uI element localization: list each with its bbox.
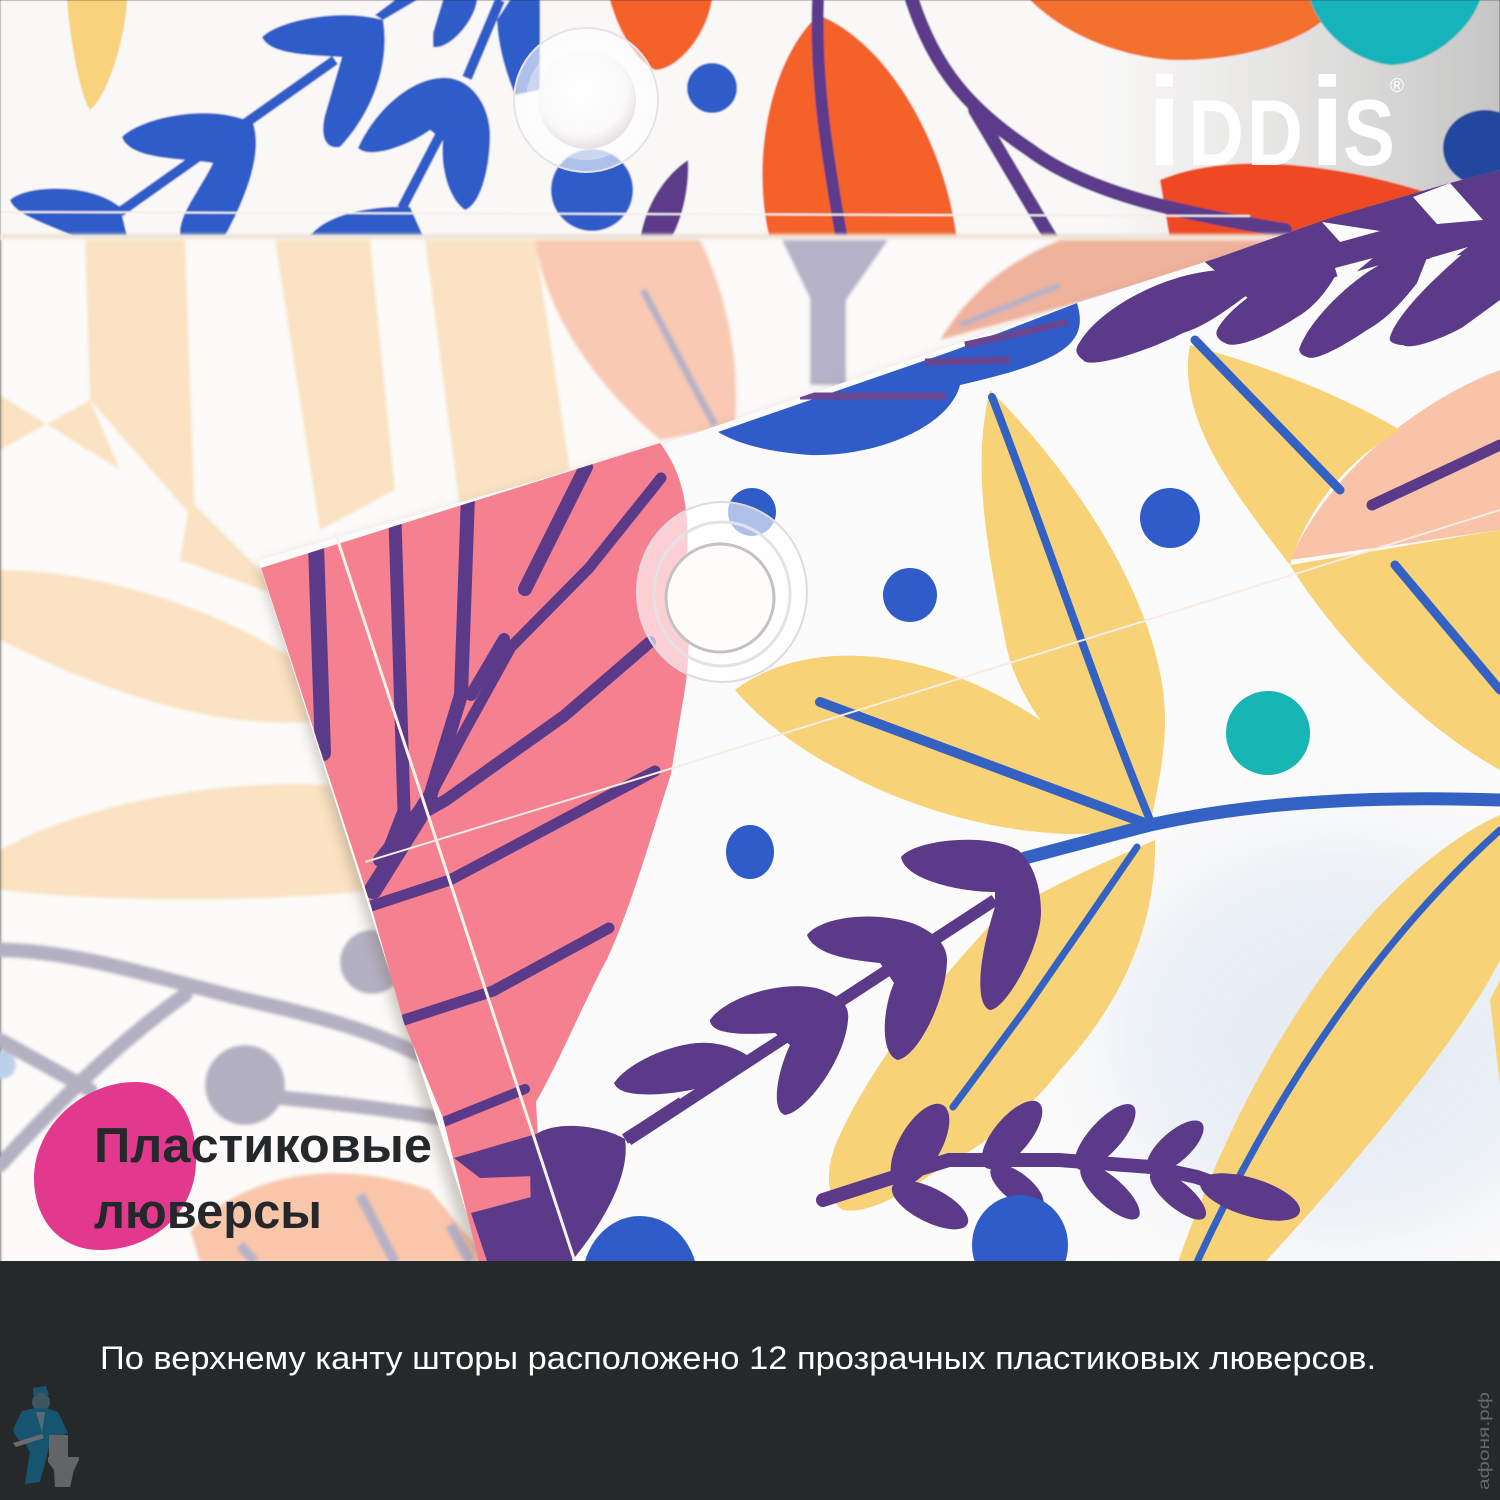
pink leaf [250,430,710,1270]
dots [1140,488,1200,548]
description text: По верхнему канту шторы расположено 12 прозрачных пластиковых люверсов. [100,1340,1376,1376]
panel: bottom dark band [0,1261,1500,1500]
dark purple veins in pink leaf [316,467,661,1123]
purple branch top right [1076,165,1500,363]
navy blob [1443,110,1500,186]
yellow leaf [67,0,127,110]
seam [0,212,1250,216]
lower blue dots [972,1195,1068,1261]
logo: iDDiS: S [1343,80,1395,185]
purple branch [614,840,1041,1140]
orange leaves [610,0,712,70]
pink leaf upper [535,240,736,440]
icon: grommet lower [637,502,807,682]
panel: top curtain layer [0,0,1500,240]
seams [335,510,1500,1262]
pink blob [34,1082,196,1250]
pale leaves left [0,570,310,723]
shadow under fold [258,176,1500,1260]
blue leaf [718,303,1080,455]
peach leaf right [1290,370,1500,560]
teal leaf [1310,0,1480,65]
horizontal purple branch [816,1100,1300,1230]
heading: Пластиковые [94,1119,432,1173]
blue veins [820,340,1500,1262]
logo: iDDiS: i [1310,53,1345,192]
heading [94,1119,432,1239]
icon: plumber with toilet [13,1386,79,1487]
dark purple bud [529,1126,626,1262]
heading: люверсы [94,1185,322,1239]
blue branch [10,0,540,236]
panel: back fabric layer [0,234,1500,1267]
logo: iDDiS: D [1247,80,1303,185]
panel: front folded curtain corner [258,165,1500,1295]
logo: iDDiS: D [1188,80,1244,185]
pink leaf lower [190,1173,490,1262]
purple stems [818,0,1285,240]
grey stem [782,240,888,385]
logo: iDDiS: i [1147,53,1182,192]
logo: iDDiS [1147,53,1404,192]
icon: grommet upper [514,28,658,172]
logo: iDDiS: ® [1390,76,1404,97]
blue dot [687,63,737,113]
watermark: афоня.рф [1476,1392,1493,1490]
yellow leaves [735,345,1500,1262]
peach stripes [85,240,195,520]
grey branches [0,950,440,1165]
